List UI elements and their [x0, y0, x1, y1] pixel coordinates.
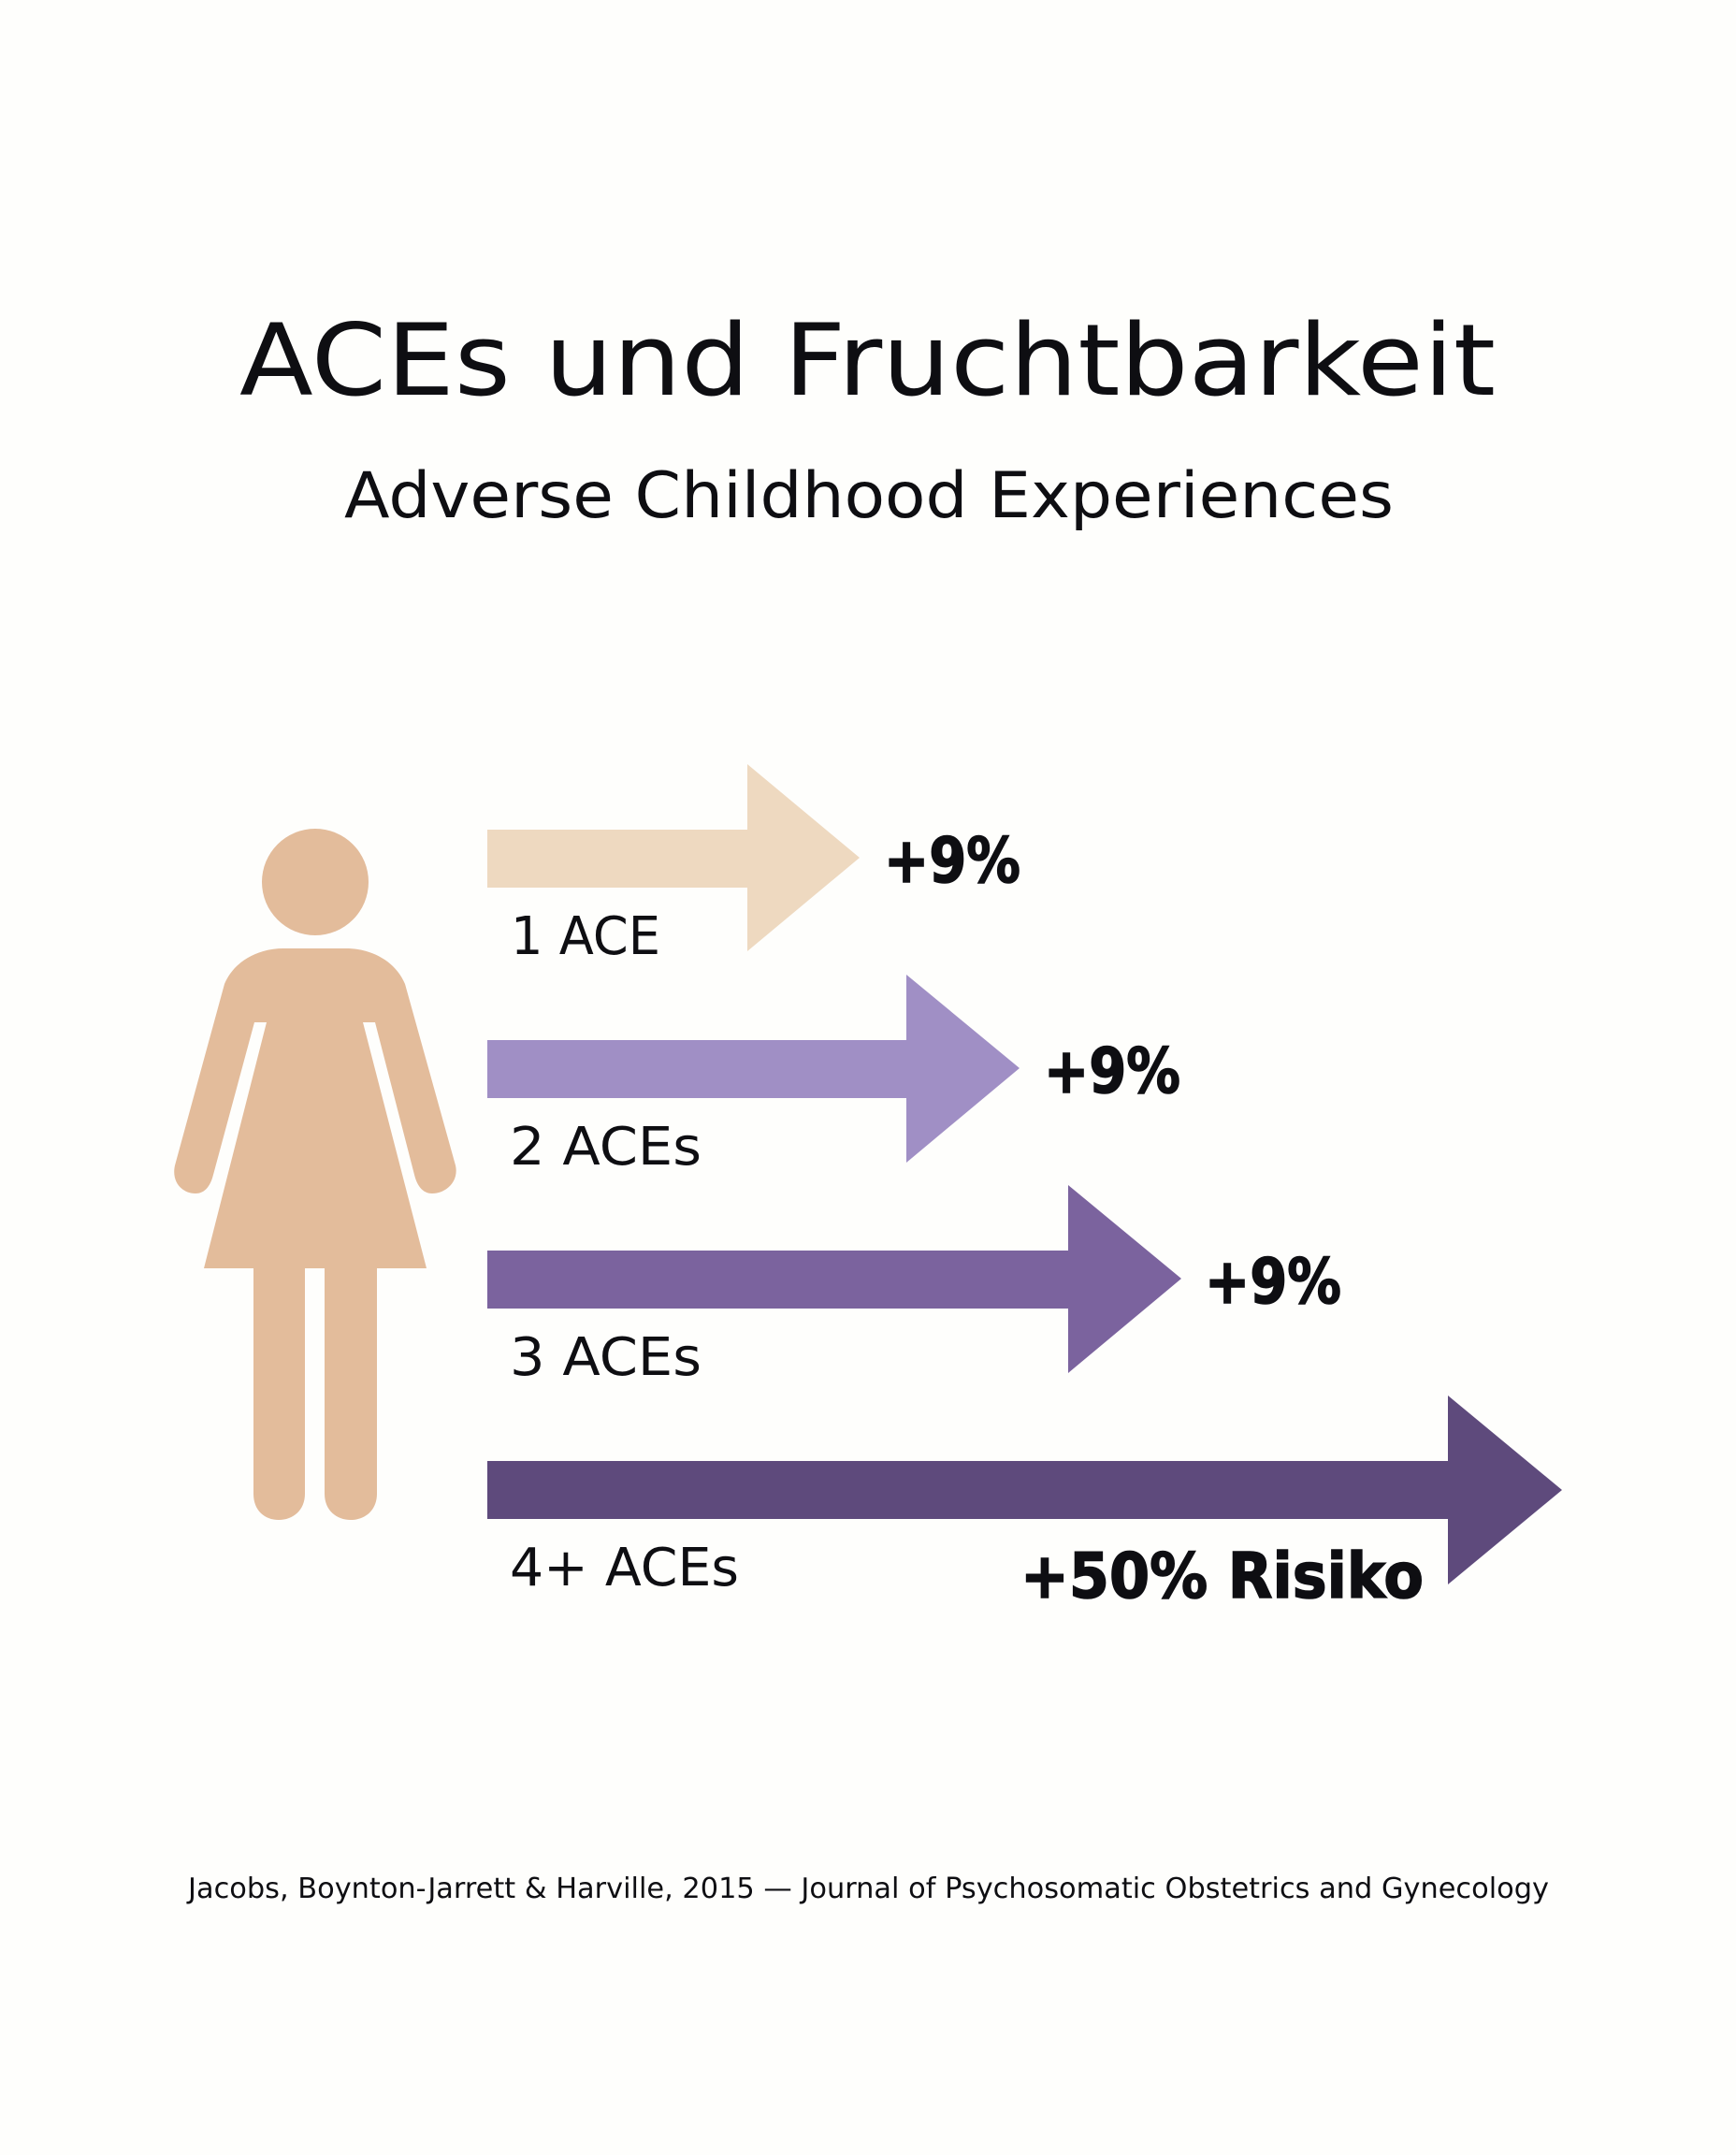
arrow: 2 ACEs row: [487, 975, 1180, 1178]
source citation: Jacobs, Boynton-Jarrett & Harville, 2015 — Journal of Psychosomatic Obstetrics and Gynecology: [186, 1873, 1549, 1905]
label: 2 ACEs: 2 ACEs: [510, 1117, 702, 1178]
value: +50% Risiko: +50% Risiko: [1020, 1540, 1424, 1613]
arrow 1: [487, 764, 860, 951]
subtitle: Adverse Childhood Experiences: [344, 459, 1394, 533]
title: ACEs und Fruchtbarkeit: [239, 303, 1496, 418]
label: 4+ ACEs: 4+ ACEs: [510, 1538, 739, 1598]
arrow 2: [487, 975, 1020, 1163]
value: +9%: +9%: [1205, 1245, 1341, 1318]
value: +9%: +9%: [884, 824, 1020, 897]
arrow 3: [487, 1185, 1181, 1373]
arrow: 3 ACEs row: [487, 1185, 1341, 1388]
value: +9%: +9%: [1044, 1034, 1180, 1107]
label: 3 ACEs: 3 ACEs: [510, 1327, 702, 1388]
arrow: 1 ACE row: [487, 764, 1020, 967]
arrow: 4+ ACEs row: [487, 1396, 1562, 1613]
arrow 4: [487, 1396, 1562, 1584]
icon: female figure: [174, 829, 456, 1520]
label: 1 ACE: 1 ACE: [511, 906, 660, 967]
